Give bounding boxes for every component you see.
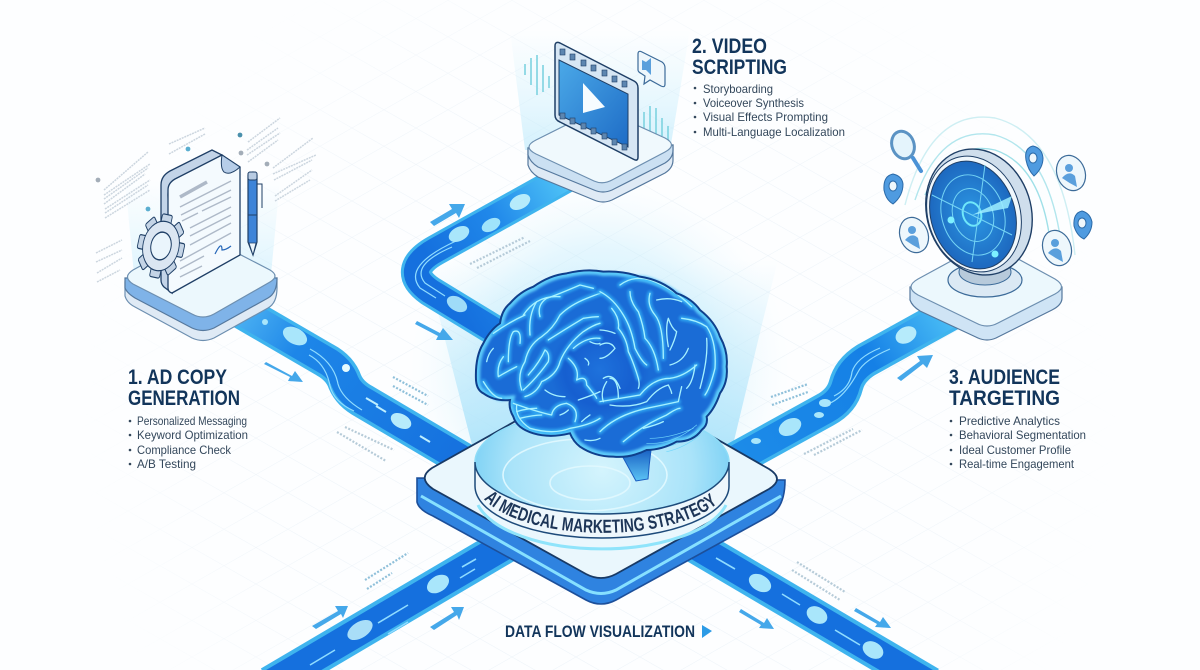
platform side xyxy=(417,478,785,604)
text block: ad copy generation: A/B Testing xyxy=(137,457,196,471)
platform 2 xyxy=(528,145,673,202)
platform top xyxy=(425,377,777,578)
binary data labels beside roads xyxy=(337,237,862,600)
text block: video scripting: 2. VIDEO xyxy=(692,35,767,58)
magnifier xyxy=(888,128,921,171)
platform 1 xyxy=(125,278,277,340)
floor circuit rings xyxy=(503,439,667,511)
pen xyxy=(248,172,262,255)
flow arrows xyxy=(264,204,933,630)
road: ad copy to centre xyxy=(215,296,470,464)
gear xyxy=(132,210,190,282)
panel: audience targeting icon xyxy=(884,117,1092,340)
road: video to centre xyxy=(416,178,565,352)
text block: audience targeting: Behavioral Segmentation xyxy=(959,428,1086,442)
brain outline xyxy=(476,270,727,457)
text block: video scripting: SCRIPTING xyxy=(692,56,787,79)
film frame xyxy=(555,42,638,160)
data packets on road 3 xyxy=(751,323,919,444)
radar base xyxy=(948,259,1022,297)
ring band xyxy=(475,462,729,538)
document xyxy=(161,150,240,293)
central platform xyxy=(416,421,786,605)
audience avatars xyxy=(895,151,1090,270)
ring floor xyxy=(475,410,729,514)
road: bottom left xyxy=(270,525,540,670)
icon glow xyxy=(125,180,280,285)
text block: ad copy generation: 1. AD COPY xyxy=(128,366,227,389)
signal arcs xyxy=(905,117,1075,255)
text block: ad copy generation: Keyword Optimization xyxy=(137,428,248,442)
text block: audience targeting: TARGETING xyxy=(949,387,1060,410)
radar dish xyxy=(910,135,1048,289)
platform 3 xyxy=(910,287,1062,340)
panel: ad copy generation icon xyxy=(96,118,316,340)
signature xyxy=(215,246,231,254)
play triangle xyxy=(583,83,605,113)
data dots xyxy=(96,133,269,211)
text block: ad copy generation: GENERATION xyxy=(128,387,240,410)
text block: audience targeting: Ideal Customer Profile xyxy=(959,443,1071,457)
text block: audience targeting: Real-time Engagement xyxy=(959,457,1075,471)
text block: audience targeting xyxy=(949,366,1086,471)
brain stem xyxy=(620,450,651,481)
scattered data text xyxy=(96,118,316,282)
data packets on road 1 xyxy=(262,319,430,442)
sound waves xyxy=(525,55,668,140)
text block: audience targeting: 3. AUDIENCE xyxy=(949,366,1060,389)
right hemisphere folds xyxy=(600,278,715,452)
light cone behind brain xyxy=(410,180,790,560)
speech bubble xyxy=(638,51,665,87)
text block: video scripting xyxy=(692,35,845,139)
sulci glow xyxy=(476,270,727,457)
text block: audience targeting: Predictive Analytics xyxy=(959,414,1060,428)
text block: video scripting: Visual Effects Prompting xyxy=(703,110,828,124)
text block: ad copy generation xyxy=(128,366,248,471)
text block: video scripting: Voiceover Synthesis xyxy=(703,96,804,110)
icon glow xyxy=(510,30,690,150)
location pins xyxy=(884,146,1092,239)
ring label: AI MEDICAL MARKETING STRATEGY xyxy=(484,492,715,533)
brain body xyxy=(476,270,727,457)
text block: ad copy generation: Compliance Check xyxy=(137,443,232,457)
panel: video scripting icon xyxy=(510,30,690,202)
background grid xyxy=(146,0,1051,670)
road: bottom right xyxy=(660,525,930,670)
text block: ad copy generation: Personalized Messaging xyxy=(137,414,247,428)
cerebellum lines xyxy=(647,425,700,452)
data flow caption: DATA FLOW VISUALIZATION xyxy=(505,622,695,641)
road: audience to centre xyxy=(700,308,960,479)
left hemisphere folds xyxy=(483,285,600,441)
text block: video scripting: Storyboarding xyxy=(703,82,773,96)
data packets on road 2 xyxy=(444,191,533,316)
brain xyxy=(476,270,727,481)
text block: video scripting: Multi-Language Localization xyxy=(703,125,845,139)
